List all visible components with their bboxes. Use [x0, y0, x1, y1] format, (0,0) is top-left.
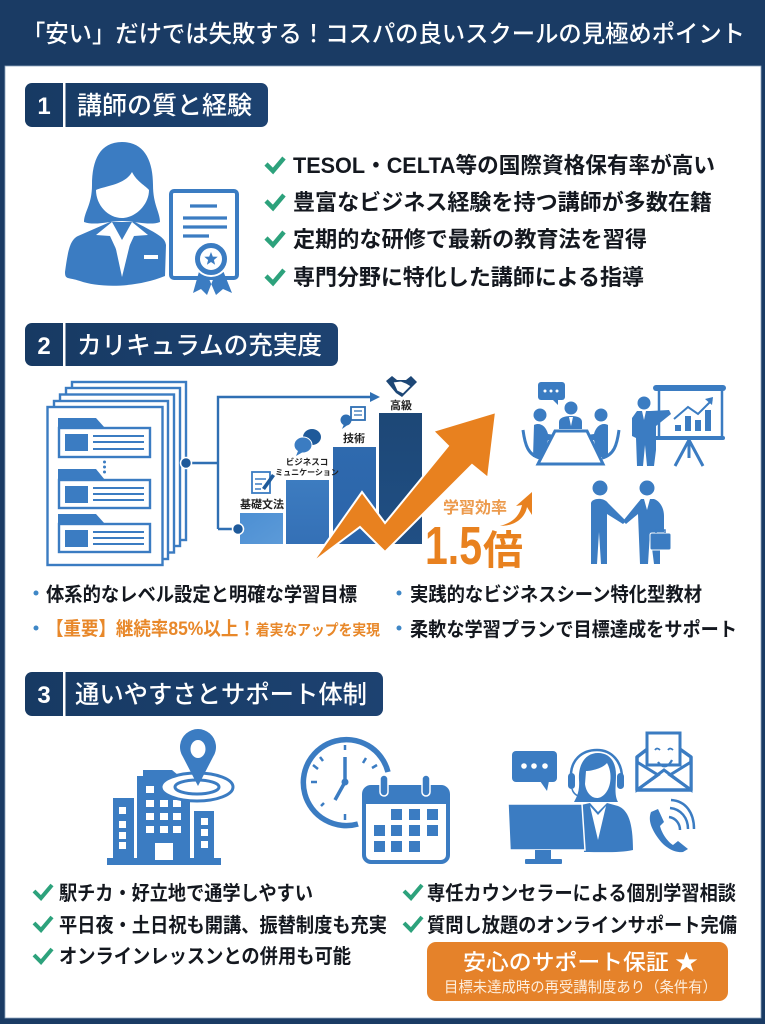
callout: support guarantee: 安心のサポート保証 ★	[463, 950, 698, 975]
section 2 heading: 2	[37, 333, 51, 360]
bullet list: curriculum: 実践的なビジネスシーン特化型教材	[410, 584, 702, 606]
section 3 heading: 3	[37, 682, 51, 709]
icon: telephone	[650, 800, 694, 852]
section 1 heading	[25, 83, 268, 127]
icon: handshake people	[591, 480, 671, 564]
section 1 heading: 講師の質と経験	[77, 92, 252, 120]
icon: presenter with chart	[632, 385, 726, 466]
icon: speech	[340, 407, 365, 429]
bar chart: level steps: ビジネスコ	[286, 457, 328, 467]
checklist: support: 質問し放題のオンラインサポート完備	[427, 914, 737, 937]
icon: handshake	[386, 376, 417, 397]
section 3 heading: 通いやすさとサポート体制	[75, 681, 367, 709]
bullet list: curriculum	[34, 583, 737, 641]
bar chart: level steps	[240, 376, 422, 544]
icon: instructor	[65, 142, 166, 286]
section 1 heading: 1	[37, 93, 51, 120]
growth arrow	[312, 412, 496, 563]
icon: building with location pin	[107, 729, 233, 865]
highlighted retention message: 【重要】継続率85%以上！着実なアップを実現	[46, 618, 380, 640]
icon: meeting	[523, 382, 619, 464]
bar chart: level steps: 基礎文法	[240, 497, 284, 511]
callout: learning efficiency 1.5x: 倍	[483, 529, 523, 573]
section 2 heading: カリキュラムの充実度	[77, 332, 322, 360]
bullet list: curriculum: 体系的なレベル設定と明確な学習目標	[46, 583, 357, 606]
icon: chat bubbles	[294, 429, 321, 456]
callout: learning efficiency 1.5x	[425, 492, 532, 576]
checklist: instructor	[266, 153, 715, 290]
checklist: instructor: 定期的な研修で最新の教育法を習得	[293, 227, 647, 252]
title: 「安い」だけでは失敗する！コスパの良いスクールの見極めポイント	[22, 21, 745, 48]
icon: stacked curriculum documents	[48, 382, 186, 565]
callout: learning efficiency 1.5x: 学習効率	[443, 498, 507, 517]
bar chart: level steps: 高級	[390, 398, 412, 412]
checklist: access	[34, 882, 387, 968]
checklist: support: 専任カウンセラーによる個別学習相談	[427, 882, 736, 905]
checklist: instructor: TESOL・CELTA等の国際資格保有率が高い	[293, 153, 715, 178]
callout: support guarantee	[427, 942, 728, 1001]
icon: envelope	[637, 733, 691, 790]
icon: certificate	[171, 191, 237, 295]
icon: support agent	[508, 750, 633, 864]
checklist: support	[404, 882, 737, 937]
bar chart: level steps: ミュニケーション	[275, 468, 339, 477]
checklist: access: 平日夜・土日祝も開講、振替制度も充実	[59, 914, 387, 937]
checklist: access: オンラインレッスンとの併用も可能	[59, 945, 351, 968]
icon: clock and calendar	[303, 740, 448, 862]
section 2 heading	[25, 323, 338, 366]
checklist: instructor: 専門分野に特化した講師による指導	[293, 265, 644, 290]
checklist: instructor: 豊富なビジネス経験を持つ講師が多数在籍	[293, 190, 712, 215]
section 3 heading	[25, 672, 383, 716]
icon: notepad	[252, 472, 275, 493]
checklist: access: 駅チカ・好立地で通学しやすい	[59, 882, 313, 905]
callout: support guarantee: 目標未達成時の再受講制度あり（条件有）	[444, 979, 717, 996]
bar chart: level steps: 技術	[343, 431, 365, 445]
callout: learning efficiency 1.5x: 1.5	[425, 516, 482, 576]
bullet list: curriculum: 柔軟な学習プランで目標達成をサポート	[410, 618, 737, 641]
connector arrows	[180, 392, 380, 534]
